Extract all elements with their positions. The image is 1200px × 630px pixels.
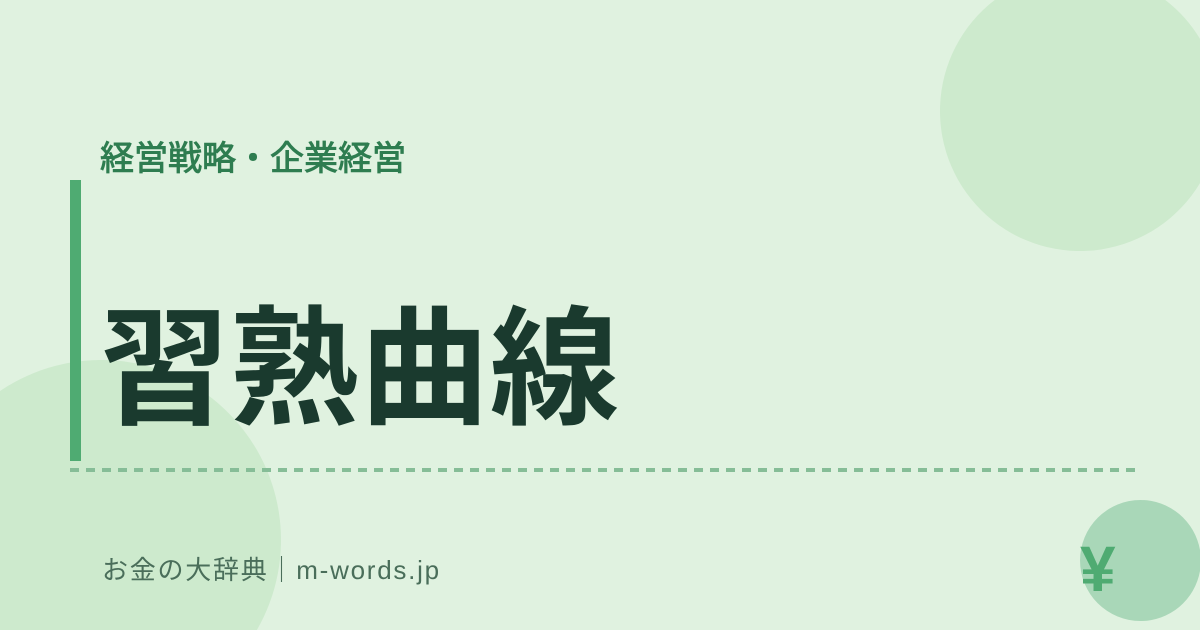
dashed divider <box>70 468 1135 472</box>
decorative circle: bottom left <box>0 360 281 630</box>
accent bar <box>70 180 81 461</box>
decorative circle: bottom right <box>1080 500 1200 621</box>
footer site name: お金の大辞典｜m-words.jp <box>102 555 441 585</box>
icon: yen sign: ¥ <box>1080 533 1116 605</box>
category heading: 経営戦略・企業経営 <box>100 140 406 178</box>
main title: 習熟曲線 <box>100 298 620 442</box>
decorative circle: top right <box>940 0 1200 251</box>
